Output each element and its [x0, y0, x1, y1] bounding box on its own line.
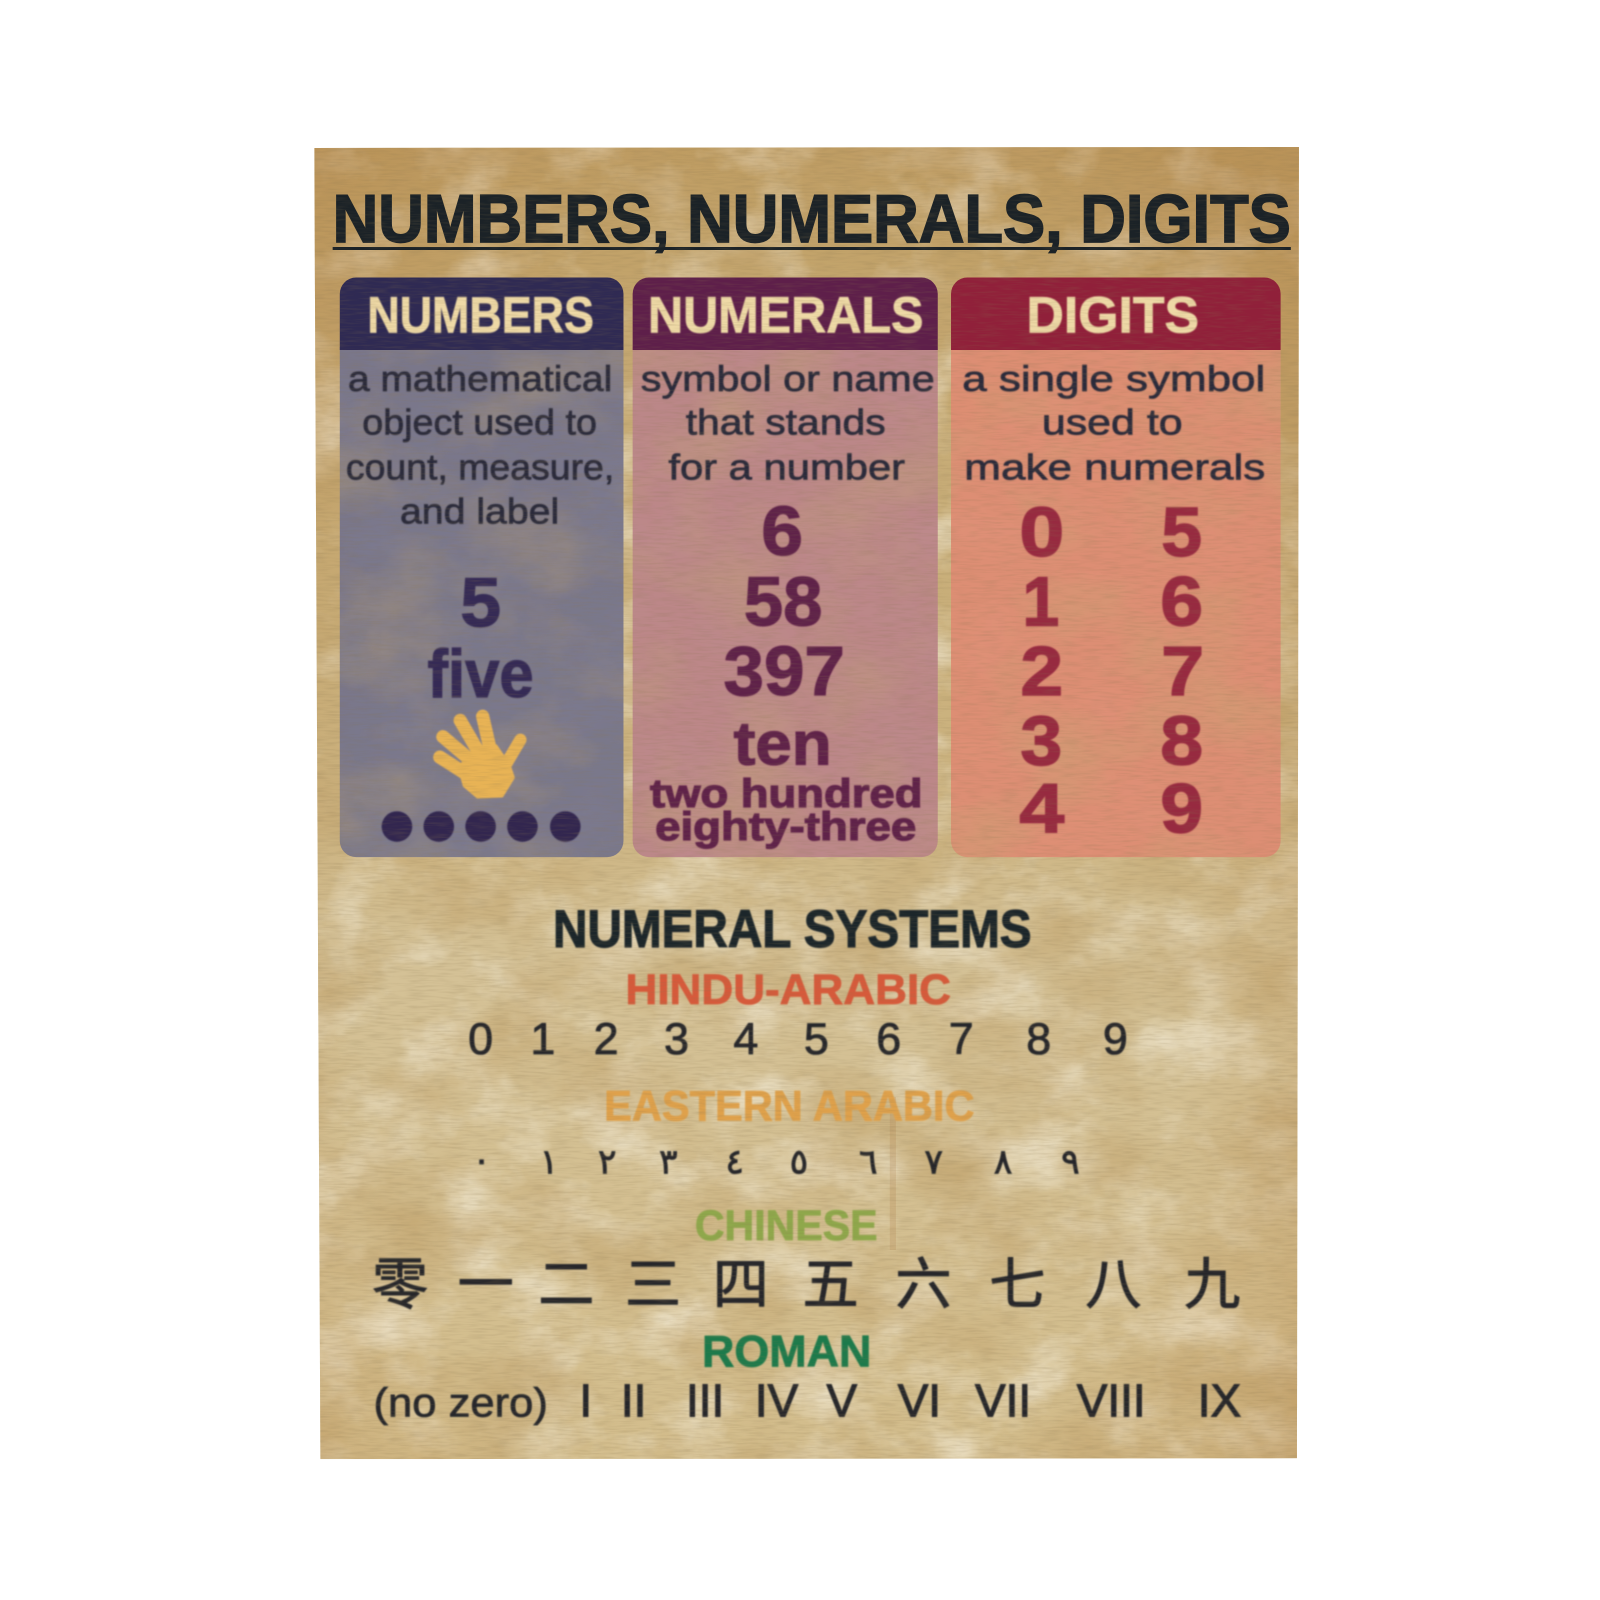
hindu-arabic digits: 1	[530, 1013, 555, 1064]
numerals examples	[650, 492, 922, 849]
numbers definition: a mathematical	[348, 359, 612, 399]
roman digits: VII	[975, 1374, 1031, 1426]
hindu-arabic digits: 8	[1026, 1013, 1051, 1064]
chinese digits: 三	[625, 1253, 681, 1316]
numbers examples: five	[428, 637, 534, 712]
heading: roman: ROMAN	[702, 1325, 871, 1376]
numerals examples: 58	[744, 563, 822, 641]
eastern arabic digits: ٩	[1061, 1142, 1080, 1182]
panel: numerals	[633, 278, 938, 857]
heading: numeral systems: NUMERAL SYSTEMS	[553, 900, 1032, 959]
digits list: 5	[1161, 493, 1202, 571]
eastern arabic digits: ٢	[598, 1142, 616, 1182]
hindu-arabic digits: 5	[804, 1013, 829, 1064]
roman digits: VIII	[1077, 1374, 1146, 1426]
chinese digits: 四	[713, 1253, 769, 1316]
numerals examples: two hundred	[650, 772, 922, 816]
roman digits: (no zero)	[373, 1379, 548, 1425]
roman digits: V	[827, 1374, 858, 1426]
digits definition	[962, 359, 1265, 488]
panel texture overlay	[340, 350, 1281, 857]
roman digits	[373, 1374, 1241, 1426]
heading: hindu-arabic: HINDU-ARABIC	[626, 966, 951, 1014]
eastern arabic digits: ٨	[994, 1142, 1012, 1182]
digits definition: a single symbol	[962, 359, 1265, 399]
digits list	[1019, 493, 1204, 848]
eastern arabic digits: ١	[540, 1142, 558, 1182]
numerals definition: symbol or name	[641, 359, 935, 399]
numerals header	[633, 278, 938, 350]
chinese digits: 八	[1085, 1253, 1141, 1316]
chinese digits: 九	[1184, 1253, 1240, 1316]
digits list: 3	[1020, 701, 1062, 779]
numerals definition: that stands	[686, 403, 886, 443]
roman digits: III	[686, 1374, 724, 1426]
panel: digits	[951, 278, 1281, 857]
chinese digits: 五	[803, 1253, 859, 1316]
hindu-arabic digits	[468, 1013, 1128, 1064]
numbers definition: object used to	[362, 403, 597, 443]
eastern arabic digits: ٧	[924, 1142, 943, 1182]
numbers body	[340, 347, 623, 857]
icon: hand with five fingers	[440, 716, 520, 797]
roman digits: II	[621, 1374, 646, 1426]
heading: eastern arabic: EASTERN ARABIC	[604, 1082, 974, 1130]
five dots	[382, 811, 581, 842]
digits body	[951, 347, 1281, 857]
numbers definition	[346, 359, 614, 531]
chinese digits: 一	[458, 1253, 514, 1316]
heading: numbers: NUMBERS	[367, 287, 594, 344]
numerals definition	[641, 359, 935, 488]
chinese digits: 零	[372, 1253, 428, 1316]
hindu-arabic digits: 0	[468, 1013, 493, 1064]
chinese digits: 六	[895, 1253, 952, 1316]
numerals examples: 397	[723, 632, 845, 710]
chinese digits: 七	[989, 1253, 1045, 1316]
roman digits: VI	[898, 1374, 941, 1426]
eastern arabic digits: ٦	[859, 1142, 878, 1182]
roman digits: IV	[755, 1374, 799, 1426]
numerals definition: for a number	[668, 448, 905, 488]
eastern arabic digits: ٠	[472, 1140, 491, 1180]
digits definition: make numerals	[964, 448, 1265, 488]
numbers definition: and label	[400, 491, 559, 531]
digits list: 6	[1160, 563, 1203, 641]
canvas weave texture	[306, 143, 1306, 1464]
numbers definition: count, measure,	[346, 448, 614, 488]
digits header	[951, 278, 1281, 350]
digits list: 7	[1161, 632, 1204, 710]
chinese digits: 二	[538, 1253, 594, 1316]
numerals examples: ten	[734, 709, 832, 777]
hindu-arabic digits: 9	[1103, 1013, 1128, 1064]
heading: digits: DIGITS	[1027, 287, 1199, 344]
digits list: 9	[1160, 770, 1203, 848]
panel: numbers	[340, 278, 623, 857]
eastern arabic digits	[472, 1140, 1080, 1182]
hindu-arabic digits: 7	[949, 1013, 974, 1064]
heading: numerals: NUMERALS	[648, 287, 923, 344]
panel: parchment poster background	[306, 143, 1306, 1464]
digits list: 2	[1020, 632, 1063, 710]
digits list: 0	[1019, 493, 1064, 571]
roman digits: I	[579, 1374, 592, 1426]
title: NUMBERS, NUMERALS, DIGITS	[333, 182, 1291, 257]
digits definition: used to	[1042, 403, 1183, 443]
text layer	[346, 287, 1265, 1426]
numerals examples: 6	[761, 492, 803, 570]
hindu-arabic digits: 4	[733, 1013, 758, 1064]
digits list: 8	[1160, 701, 1203, 779]
numbers examples: 5	[460, 564, 501, 642]
chinese digits	[372, 1253, 1240, 1316]
hindu-arabic digits: 3	[664, 1013, 689, 1064]
numbers examples	[382, 564, 581, 842]
eastern arabic digits: ٥	[790, 1142, 808, 1182]
eastern arabic digits: ٣	[659, 1142, 678, 1182]
roman digits: IX	[1198, 1374, 1241, 1426]
hindu-arabic digits: 2	[594, 1013, 619, 1064]
digits list: 4	[1019, 770, 1065, 848]
numerals examples: eighty-three	[655, 805, 916, 849]
digits list: 1	[1022, 563, 1059, 641]
heading: chinese: CHINESE	[695, 1202, 878, 1250]
numerals body	[633, 347, 938, 857]
hindu-arabic digits: 6	[876, 1013, 901, 1064]
eastern arabic digits: ٤	[725, 1142, 744, 1182]
numbers header	[340, 278, 623, 350]
